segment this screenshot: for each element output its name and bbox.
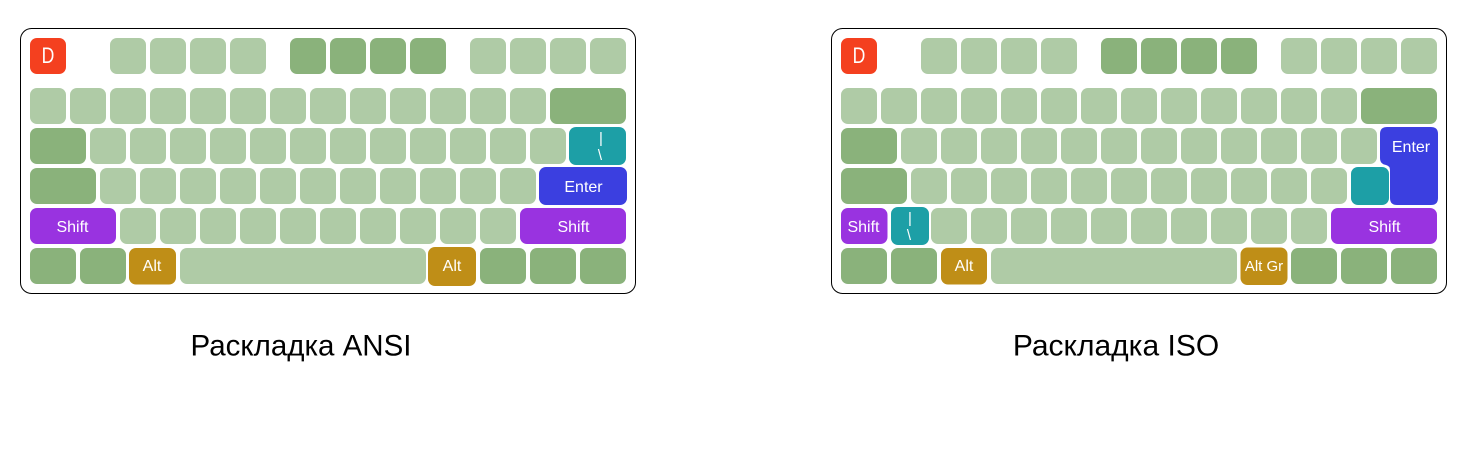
key: D logo	[30, 38, 66, 74]
heading: ANSI layout: Раскладка ANSI	[191, 330, 411, 362]
key: Alt Gr: Alt Gr	[1245, 258, 1283, 275]
key: right Alt	[428, 247, 476, 286]
key: ISO hash (teal)	[1351, 167, 1389, 205]
key: right Shift: Shift	[557, 219, 590, 236]
right modifier keys	[480, 248, 626, 284]
key: D logo: D	[853, 44, 865, 69]
number keys row	[841, 88, 1437, 124]
key: right Shift	[520, 208, 626, 244]
key: ISO Enter: Enter	[1392, 139, 1431, 156]
key: left Shift: Shift	[847, 219, 880, 236]
key: Enter: Enter	[564, 179, 603, 196]
key: space bar	[991, 248, 1237, 284]
function keys row	[110, 38, 626, 74]
key: left Shift	[841, 208, 888, 244]
caps keys row	[841, 168, 1347, 204]
keyboard frame	[832, 28, 1446, 294]
key: backslash: \	[907, 227, 912, 244]
key: ISO Enter	[1380, 127, 1438, 205]
left modifier keys	[841, 248, 937, 284]
left modifier keys	[30, 248, 126, 284]
heading: ISO layout: Раскладка ISO	[1013, 330, 1219, 362]
key: right Shift	[1331, 208, 1437, 244]
tab keys row	[30, 128, 566, 164]
caps keys row	[30, 168, 536, 204]
key: left Shift	[30, 208, 116, 244]
key: left Alt: Alt	[143, 258, 162, 275]
keyboard: ANSI layout	[20, 28, 636, 294]
key: Alt Gr	[1240, 248, 1288, 285]
key: backslash	[891, 207, 929, 245]
shift row letter keys	[931, 208, 1327, 244]
key: backslash	[569, 127, 626, 165]
function keys row	[921, 38, 1437, 74]
key: right Alt: Alt	[443, 258, 462, 275]
key: left Alt	[129, 248, 176, 284]
key: Enter	[539, 167, 627, 205]
key: left Shift: Shift	[56, 219, 89, 236]
key: space bar	[180, 248, 426, 284]
key: left Alt: Alt	[955, 258, 974, 275]
keyboard: ISO layout	[832, 28, 1446, 294]
right modifier keys	[1291, 248, 1437, 284]
key: backslash: \	[598, 147, 603, 164]
key: right Shift: Shift	[1368, 219, 1401, 236]
key: D logo: D	[42, 44, 54, 69]
tab keys row	[841, 128, 1377, 164]
keyboard frame	[20, 28, 636, 294]
key: D logo	[841, 38, 877, 74]
number keys row	[30, 88, 626, 124]
key: left Alt	[941, 248, 987, 284]
key: backslash: |	[599, 130, 603, 147]
key: backslash: |	[908, 210, 912, 227]
shift row letter keys	[120, 208, 516, 244]
